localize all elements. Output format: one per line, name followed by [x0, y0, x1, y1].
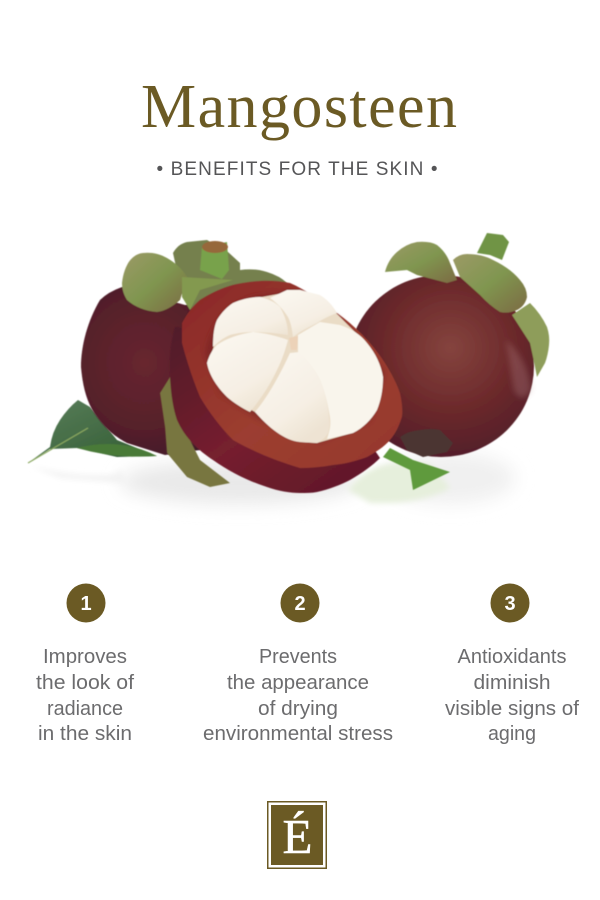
number badge 2 [280, 584, 320, 622]
left sepal on halved fruit [160, 377, 230, 487]
benefit 2 text [203, 646, 393, 745]
benefit 2 text: the appearance [227, 672, 369, 694]
fruit segments [207, 290, 383, 443]
brand logo: É [283, 809, 312, 864]
benefit 3 text: visible signs of [445, 698, 579, 720]
benefit 1 text [36, 646, 134, 745]
number badge 2: 2 [294, 593, 306, 615]
back-left leaf [28, 400, 157, 463]
benefit 2 text: of drying [258, 698, 338, 720]
reflection shadow under the fruit [30, 452, 515, 504]
subtitle: • BENEFITS FOR THE SKIN • [156, 159, 438, 180]
benefit 1 text: radiance [47, 698, 123, 720]
benefit 1 text: Improves [43, 646, 127, 668]
number badge 3 [490, 584, 530, 622]
right fruit calyx and stem [385, 233, 549, 377]
benefit 1 text: the look of [36, 672, 134, 694]
benefit 2 text: environmental stress [203, 723, 393, 745]
segment: left [207, 332, 288, 412]
number badge 1: 1 [80, 593, 92, 615]
benefit 3 text [445, 646, 579, 745]
segment: right [298, 322, 383, 439]
right fruit highlight [506, 340, 531, 398]
left fruit calyx and stem [122, 240, 287, 312]
benefit 2 text: Prevents [259, 646, 337, 668]
cut rim [182, 281, 402, 468]
segment: top right [270, 290, 337, 337]
segment: bottom [255, 352, 329, 443]
inner dark flesh edge [205, 292, 385, 442]
right fruit [348, 233, 549, 457]
benefit 1 text: in the skin [38, 723, 132, 745]
halved fruit [160, 281, 402, 493]
number badge 1 [66, 584, 106, 622]
right fruit base [400, 429, 453, 457]
segments backing [208, 290, 383, 443]
benefit 2 [203, 584, 393, 745]
brand logo [267, 801, 327, 869]
benefit 1 [36, 584, 134, 745]
title: Mangosteen [141, 73, 457, 141]
benefit 3 text: Antioxidants [458, 646, 566, 668]
benefit 3 [445, 584, 579, 745]
illustration: three mangosteens [28, 233, 549, 504]
front leaf [383, 448, 450, 490]
benefit 3 text: aging [488, 723, 536, 745]
left fruit [81, 240, 287, 455]
number badge 3: 3 [504, 593, 516, 615]
segment centre [289, 336, 298, 350]
outer skin [170, 327, 380, 493]
benefit 3 text: diminish [474, 672, 550, 694]
segment: top left [213, 297, 288, 347]
